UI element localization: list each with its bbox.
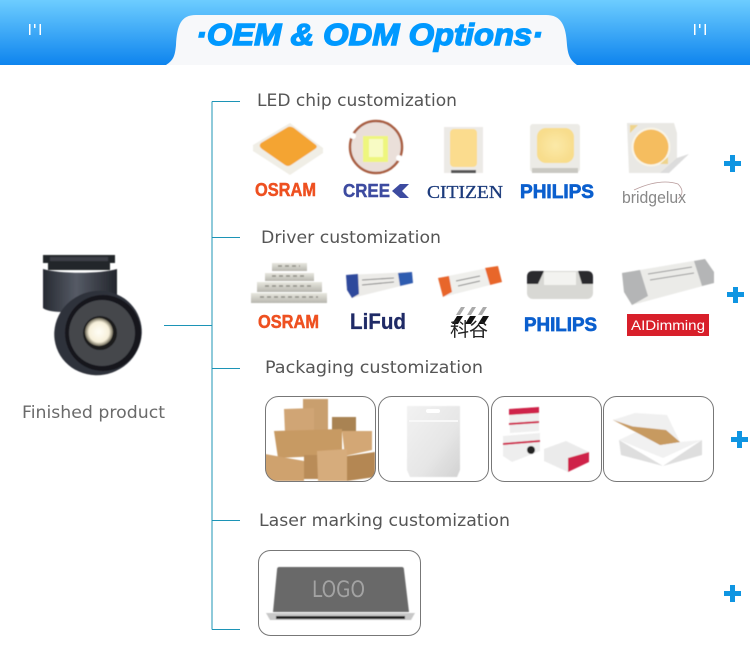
header banner [0, 0, 750, 65]
plus: packaging [731, 431, 748, 448]
driver: Koegu [438, 266, 502, 297]
logo: Philips driver: PHILIPS [524, 315, 597, 336]
packaging: plastic bag [378, 396, 488, 482]
logo: OSRAM driver: OSRAM [258, 312, 319, 332]
title: ·OEM & ODM Options· [196, 17, 543, 52]
packaging: gift boxes [492, 396, 602, 482]
heading: Packaging: Packaging customization [265, 358, 483, 378]
packaging: white mailer box [604, 396, 714, 482]
driver row [251, 259, 714, 341]
plus: laser marking [724, 585, 741, 602]
logo: CREE: CREE [343, 181, 390, 201]
icon: left small marks [29, 24, 41, 35]
finished product lamp [42, 255, 154, 388]
logo: AIDimming [627, 314, 709, 336]
logo: Koegu [450, 307, 489, 341]
logo: AIDimming: AIDimming [631, 317, 705, 333]
chip: Philips [530, 124, 580, 173]
icon: right small marks [694, 24, 706, 35]
packaging: cardboard boxes [265, 396, 376, 482]
logo: Philips: PHILIPS [520, 182, 594, 203]
heading: Driver: Driver customization [261, 228, 441, 248]
driver: LiFud [346, 272, 413, 298]
connector tree [164, 102, 240, 630]
laser-marked LOGO text: LOGO [312, 578, 365, 603]
heading: LED chip: LED chip customization [257, 91, 457, 111]
driver: AIDimming [622, 259, 714, 305]
logo: Bridgelux: bridgelux [622, 188, 686, 207]
finished product label: Finished product [22, 403, 165, 423]
driver: OSRAM stack [251, 263, 327, 303]
driver: Philips [527, 271, 593, 299]
chip: Citizen [444, 127, 483, 173]
plus: driver [727, 287, 744, 303]
panel outline: boxes [266, 396, 376, 482]
plus: LED chip [724, 155, 741, 172]
logo: LiFud: LiFud [350, 309, 406, 334]
chip: Bridgelux [627, 123, 689, 173]
chip: OSRAM [253, 123, 323, 175]
logo: Citizen: CITIZEN [427, 182, 503, 202]
heading: Laser marking: Laser marking customization [259, 511, 510, 531]
LED chip row [253, 121, 689, 207]
logo: Koegu: 科谷 [450, 319, 488, 341]
title tab [166, 15, 577, 65]
panel: laser marking logo sample [258, 550, 420, 636]
logo: OSRAM: OSRAM [255, 180, 316, 200]
chip: CREE [350, 121, 402, 173]
